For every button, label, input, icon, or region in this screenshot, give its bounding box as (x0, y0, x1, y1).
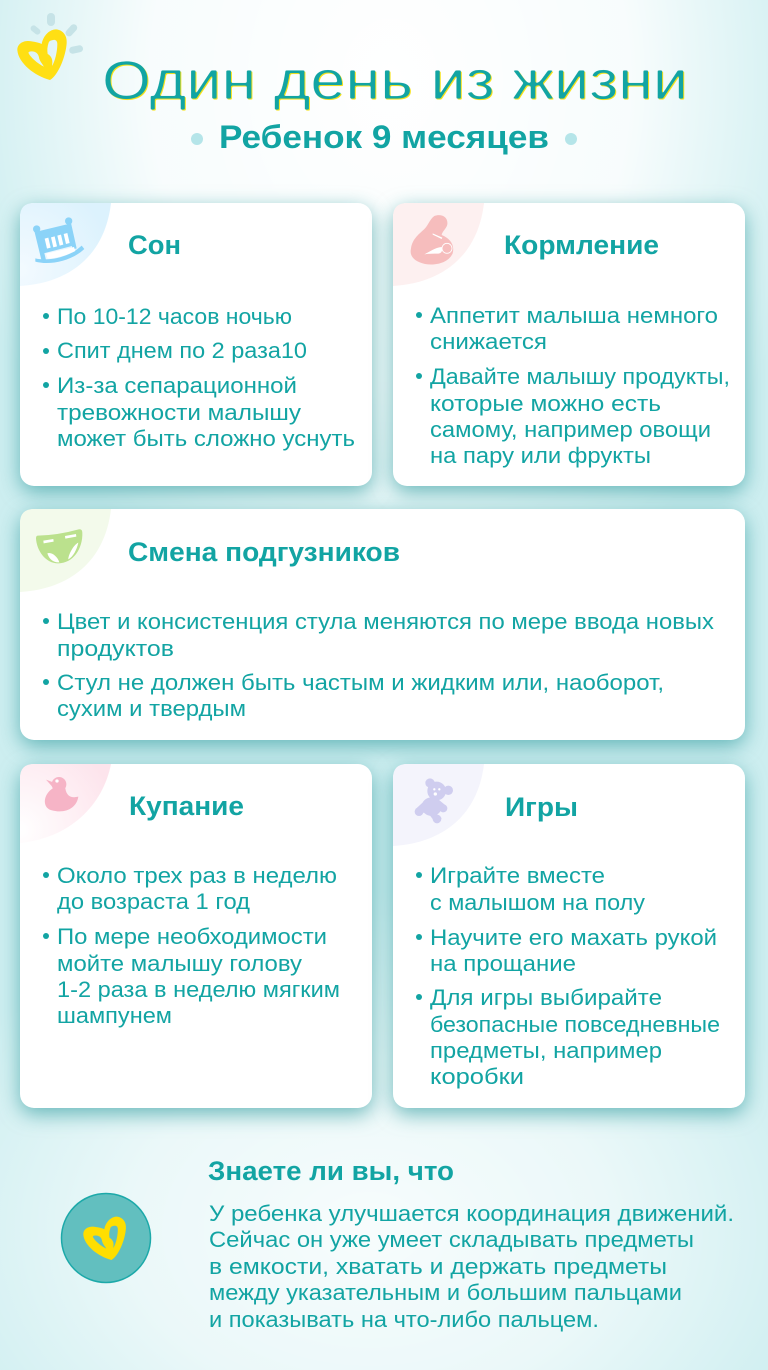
heading: Кормление (504, 230, 659, 260)
list: sleep tips: По 10-12 часов ночью (57, 304, 292, 329)
callout text (209, 1201, 734, 1332)
list: bathing tips: мойте малышу голову (57, 951, 302, 976)
list: bathing tips (43, 863, 340, 1028)
list: play tips (416, 863, 720, 1089)
list: feeding tips: самому, например овощи (430, 417, 711, 442)
callout text: У ребенка улучшается координация движений. (209, 1201, 734, 1226)
icon: teddy bear (415, 778, 453, 823)
list: sleep tips: Из-за сепарационной (57, 373, 297, 398)
callout: did you know (208, 1156, 734, 1332)
list: sleep tips: тревожности малышу (57, 400, 301, 425)
heading: Сон (128, 230, 181, 260)
list: bathing tips: Около трех раз в неделю (57, 863, 337, 888)
icon: diaper (36, 529, 82, 563)
list: play tips: на прощание (430, 951, 576, 976)
list: diaper tips: сухим и твердым (57, 696, 246, 721)
icon: rubber duck (45, 777, 78, 811)
list: diaper tips: продуктов (57, 636, 174, 661)
panel: diaper change (20, 509, 745, 740)
list: play tips: Научите его махать рукой (430, 925, 717, 950)
list: feeding tips: снижается (430, 329, 547, 354)
heading: Игры (505, 792, 578, 822)
callout heading: Знаете ли вы, что (208, 1156, 454, 1186)
list: bathing tips: По мере необходимости (57, 924, 327, 949)
list: feeding tips: которые можно есть (430, 391, 661, 416)
list: play tips: Играйте вместе (430, 863, 605, 888)
list: feeding tips (416, 303, 730, 468)
panel: feeding (393, 203, 745, 486)
list: diaper tips (43, 609, 714, 721)
icon: crib (33, 217, 84, 263)
list: feeding tips: Аппетит малыша немного (430, 303, 718, 328)
panel: play (393, 764, 745, 1108)
list: sleep tips: Спит днем по 2 раза10 (57, 338, 307, 363)
list: sleep tips: может быть сложно уснуть (57, 426, 355, 451)
callout text: между указательным и большим пальцами (209, 1280, 682, 1305)
list: bathing tips: 1-2 раза в неделю мягким (57, 977, 340, 1002)
list: diaper tips: Стул не должен быть частым и жидким или, наоборот, (57, 670, 664, 695)
list: play tips: Для игры выбирайте (430, 985, 662, 1010)
logo: heart with rays (17, 13, 84, 80)
callout text: и показывать на что-либо пальцем. (209, 1307, 599, 1332)
list: feeding tips: Давайте малышу продукты, (430, 364, 730, 389)
icon: heart badge (62, 1194, 150, 1282)
subtitle: Ребенок 9 месяцев (219, 119, 549, 155)
panel: bathing (20, 764, 372, 1108)
callout text: в емкости, хватать и держать предметы (209, 1254, 667, 1279)
list: sleep tips (43, 304, 355, 451)
list: play tips: с малышом на полу (430, 890, 645, 915)
list: bathing tips: до возраста 1 год (57, 889, 250, 914)
icon: mother and baby (411, 215, 453, 264)
list: bathing tips: шампунем (57, 1003, 172, 1028)
callout text: Сейчас он уже умеет складывать предметы (209, 1227, 694, 1252)
title: Один день из жизни (102, 49, 688, 111)
heading: Смена подгузников (128, 537, 400, 567)
heading: Купание (129, 791, 244, 821)
list: diaper tips: Цвет и консистенция стула меняются по мере ввода новых (57, 609, 714, 634)
list: play tips: коробки (430, 1064, 524, 1089)
list: play tips: предметы, например (430, 1038, 662, 1063)
panel: sleep (20, 203, 372, 486)
list: feeding tips: на пару или фрукты (430, 443, 651, 468)
list: play tips: безопасные повседневные (430, 1012, 720, 1037)
